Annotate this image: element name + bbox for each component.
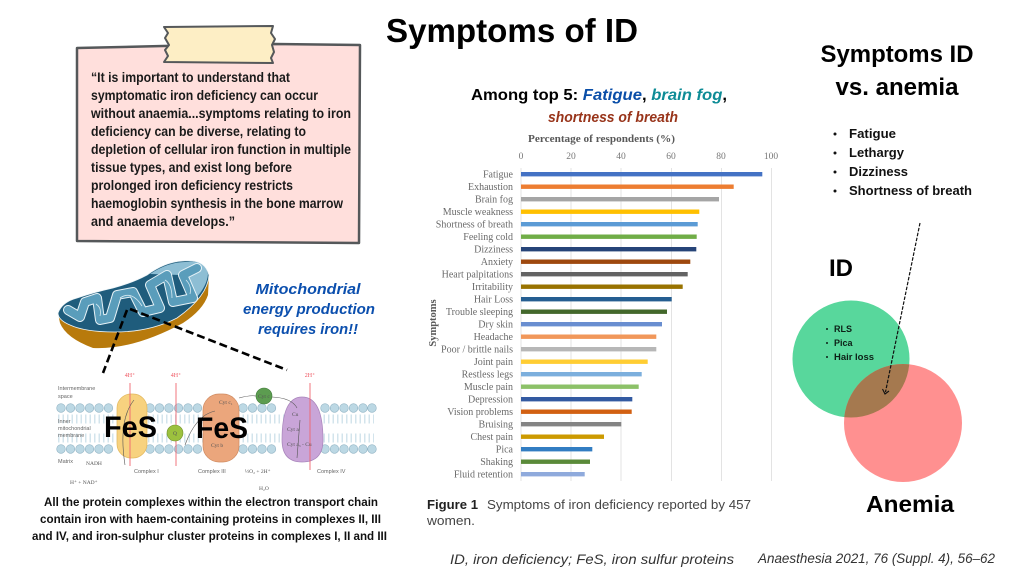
- axis ticks: 0: [519, 152, 524, 162]
- diagram: electron transport chain: Cyt c: [258, 394, 270, 400]
- list: shared symptoms: Lethargy: [849, 145, 905, 160]
- quote text: without anaemia...symptoms relating to iron: [90, 106, 351, 121]
- diagram: electron transport chain: Cyt a₃ - Cu: [287, 442, 312, 448]
- complex IV: [282, 397, 323, 462]
- axis ticks: [519, 152, 778, 162]
- category labels: Depression: [468, 394, 513, 406]
- axis ticks: 60: [666, 152, 676, 162]
- diagram: electron transport chain: Cyt a: [287, 427, 299, 433]
- category labels: Hair Loss: [474, 294, 513, 306]
- quote text: prolonged iron deficiency restricts: [91, 178, 293, 193]
- diagram labels: Inner: [58, 419, 71, 425]
- diagram: electron transport chain: H₂O: [259, 486, 269, 492]
- category labels: Bruising: [479, 420, 513, 430]
- diagram labels: Complex IV: [317, 469, 346, 475]
- list: shared symptoms: Fatigue: [849, 126, 896, 141]
- axis ticks: 80: [716, 152, 726, 162]
- quote text: and anaemia develops.”: [91, 214, 235, 229]
- category labels: Muscle weakness: [443, 207, 513, 218]
- ubiquinone: [167, 425, 183, 441]
- circle: ID: [792, 300, 910, 418]
- axis title: Percentage of respondents (%): [528, 134, 675, 145]
- figure caption: Figure 1: [427, 497, 478, 512]
- circle: anemia: [844, 364, 962, 482]
- category labels: Brain fog: [475, 194, 513, 206]
- diagram labels: Complex I: [134, 469, 159, 475]
- quote text: depletion of cellular iron function in multiple: [91, 142, 351, 157]
- quote text: symptomatic iron deficiency can occur: [91, 88, 319, 103]
- list: ID-only symptoms: [826, 324, 874, 362]
- category labels: Fluid retention: [454, 470, 513, 480]
- complex III: [203, 394, 239, 462]
- text block: electron chain caption: contain iron with haem-containing proteins in complexes II, III: [40, 514, 381, 526]
- category labels: Vision problems: [447, 407, 513, 418]
- category labels: Exhaustion: [468, 182, 513, 193]
- quote text: “It is important to understand that: [91, 70, 290, 85]
- category labels: Anxiety: [481, 257, 513, 268]
- list: shared symptoms: [834, 126, 972, 198]
- complex I: [117, 394, 147, 458]
- footnote: abbreviations: ID, iron deficiency; FeS, iron sulfur proteins: [450, 552, 734, 567]
- list: ID-only symptoms: Pica: [834, 338, 854, 348]
- list: shared symptoms: Shortness of breath: [849, 183, 972, 198]
- label: anemia: Anemia: [866, 491, 954, 517]
- heading: symptoms ID vs anemia: [820, 41, 974, 101]
- text block: electron chain caption: and IV, and iron-sulphur cluster proteins in complexes I, II and III: [32, 531, 387, 543]
- axis ticks: 100: [764, 152, 778, 162]
- cytochrome c: [256, 388, 272, 404]
- category labels: Restless legs: [462, 370, 513, 380]
- callout: mitochondrial energy: requires iron!!: [258, 321, 358, 338]
- text block: electron chain caption: All the protein complexes within the electron transport chain: [44, 497, 378, 509]
- diagram: electron transport chain: Q: [173, 431, 177, 437]
- category labels: Poor / brittle nails: [441, 344, 513, 356]
- FeS label left: FeS: [104, 411, 157, 444]
- diagram: electron transport chain: 4H⁺: [171, 372, 181, 379]
- figure caption: women.: [426, 513, 475, 528]
- diagram: electron transport chain: H⁺ + NAD⁺: [70, 479, 98, 486]
- membrane: [57, 404, 376, 453]
- gridlines: [521, 168, 772, 481]
- callout: mitochondrial energy: [243, 281, 375, 338]
- diagram: electron transport chain: Cyt c₁: [219, 400, 233, 406]
- electron paths: [123, 396, 300, 465]
- quote text: [90, 70, 351, 229]
- category labels: Headache: [474, 332, 514, 343]
- title: Symptoms of ID: [386, 12, 638, 49]
- figure caption: Symptoms of iron deficiency reported by 457: [487, 497, 751, 512]
- diagram labels: space: [58, 394, 73, 400]
- callout: mitochondrial energy: Mitochondrial: [256, 281, 361, 298]
- heading: among top 5: [471, 87, 727, 126]
- footnote: citation: Anaesthesia 2021, 76 (Suppl. 4), 56–62: [757, 551, 995, 566]
- category labels: Joint pain: [474, 357, 513, 368]
- venn diagram: [792, 255, 962, 517]
- proton arrows: [130, 383, 310, 470]
- arrow: shared symptoms to overlap: [882, 223, 920, 394]
- diagram: electron transport chain: 4H⁺: [125, 372, 135, 379]
- category labels: Muscle pain: [464, 382, 513, 393]
- diagram: electron transport chain: Cyt b: [211, 443, 223, 449]
- diagram labels: mitochondrial: [58, 426, 91, 432]
- icon: mitochondrion: [58, 261, 209, 348]
- diagram: electron transport chain: 2H⁺: [305, 372, 315, 379]
- quote text: haemoglobin synthesis in the bone marrow: [91, 196, 343, 211]
- FeS label right: FeS: [196, 412, 248, 445]
- diagram: electron transport chain: NADH: [86, 461, 102, 467]
- figure caption: [426, 497, 751, 528]
- category labels: Fatigue: [483, 170, 514, 180]
- diagram: electron transport chain: Cu: [292, 412, 299, 418]
- category labels: Dizziness: [474, 244, 513, 256]
- list: ID-only symptoms: Hair loss: [834, 352, 874, 362]
- axis label: symptoms: Symptoms: [428, 299, 439, 347]
- category labels: Trouble sleeping: [446, 307, 513, 318]
- diagram labels: [58, 386, 346, 475]
- diagram labels: Matrix: [58, 459, 73, 465]
- axis ticks: 20: [566, 152, 576, 162]
- quote text: deficiency can be diverse, relating to: [91, 124, 306, 139]
- panel: quote note: [77, 26, 360, 243]
- category labels: Feeling cold: [463, 232, 513, 243]
- diagram labels: membrane: [58, 433, 84, 439]
- heading: among top 5: shortness of breath: [548, 109, 678, 126]
- category labels: Shortness of breath: [436, 220, 513, 230]
- category labels: Irritability: [472, 282, 513, 293]
- note background: [77, 44, 360, 243]
- quote text: tissue types, and exist long before: [91, 160, 292, 175]
- diagram: electron transport chain: ½O₂ + 2H⁺: [245, 468, 271, 475]
- label: ID: ID: [829, 255, 853, 282]
- category labels: Shaking: [480, 457, 513, 468]
- heading: symptoms ID vs anemia: Symptoms ID: [820, 41, 974, 68]
- list: ID-only symptoms: RLS: [834, 324, 852, 334]
- heading: symptoms ID vs anemia: vs. anemia: [836, 74, 959, 101]
- category labels: Pica: [496, 444, 514, 456]
- text block: electron chain caption: [32, 497, 387, 543]
- dashed zoom lines: [103, 309, 287, 373]
- category labels: Heart palpitations: [442, 270, 513, 280]
- icon: tape: [164, 26, 275, 63]
- heading: among top 5: Among top 5: Fatigue, brain fog,: [471, 87, 727, 104]
- category labels: [436, 170, 514, 480]
- diagram labels: Complex III: [198, 469, 226, 475]
- category labels: Chest pain: [470, 432, 513, 443]
- diagram labels: Intermembrane: [58, 386, 95, 392]
- overlap: [844, 364, 910, 418]
- category labels: Dry skin: [478, 320, 513, 330]
- bars: [521, 172, 762, 476]
- diagram: electron transport chain: [57, 372, 376, 492]
- callout: mitochondrial energy: energy production: [243, 301, 375, 318]
- list: shared symptoms: Dizziness: [849, 164, 908, 179]
- axis ticks: 40: [616, 152, 626, 162]
- bar chart: symptoms: [428, 134, 778, 481]
